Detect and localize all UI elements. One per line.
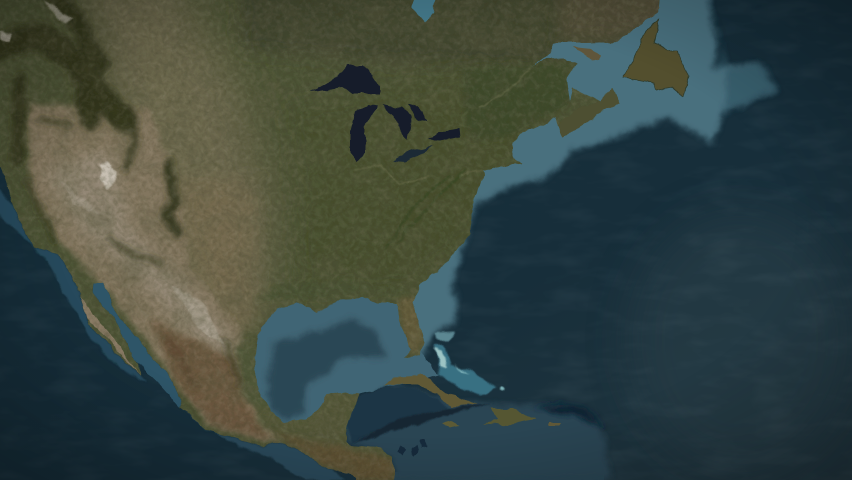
jamaica xyxy=(442,421,460,429)
appalachian ridges xyxy=(385,170,465,250)
great lakes xyxy=(310,65,461,163)
puerto rico trench xyxy=(535,403,607,428)
bottom edge fill: central america xyxy=(356,472,394,480)
rocky mountain forests xyxy=(0,0,240,385)
eastern forests xyxy=(348,98,546,280)
hispaniola xyxy=(483,408,537,425)
great plains xyxy=(80,0,270,330)
lake huron xyxy=(382,103,412,140)
lake superior xyxy=(310,65,380,95)
lake michigan xyxy=(350,103,377,162)
anticosti island xyxy=(573,47,602,59)
pacific coastal shelf xyxy=(0,165,345,480)
cape breton and nova scotia xyxy=(557,88,620,138)
bahamas banks xyxy=(434,332,506,395)
atlantic continental shelf xyxy=(400,0,778,360)
bottom edge fill: caribbean xyxy=(394,472,604,480)
puerto rico xyxy=(547,423,560,426)
georgian bay xyxy=(408,105,426,122)
desert southwest xyxy=(28,105,280,445)
mexico highlands xyxy=(150,320,270,440)
cayman trench xyxy=(353,405,490,442)
urban and farmland patches xyxy=(355,68,530,185)
greater antilles xyxy=(383,375,560,429)
cuba xyxy=(383,375,478,407)
lake erie xyxy=(393,146,433,163)
snow and salt flats xyxy=(0,0,225,345)
lake ontario xyxy=(427,129,461,141)
deep gulf basin xyxy=(267,318,387,420)
north america landmass xyxy=(0,0,660,480)
gulf coast plain xyxy=(260,288,287,300)
yucatan and central america xyxy=(255,398,379,472)
canadian shield xyxy=(240,0,660,68)
florida xyxy=(397,295,424,356)
lake winnipeg xyxy=(413,0,438,23)
gulf of mexico xyxy=(240,290,440,430)
newfoundland xyxy=(623,20,688,95)
caribbean sea xyxy=(345,385,612,480)
